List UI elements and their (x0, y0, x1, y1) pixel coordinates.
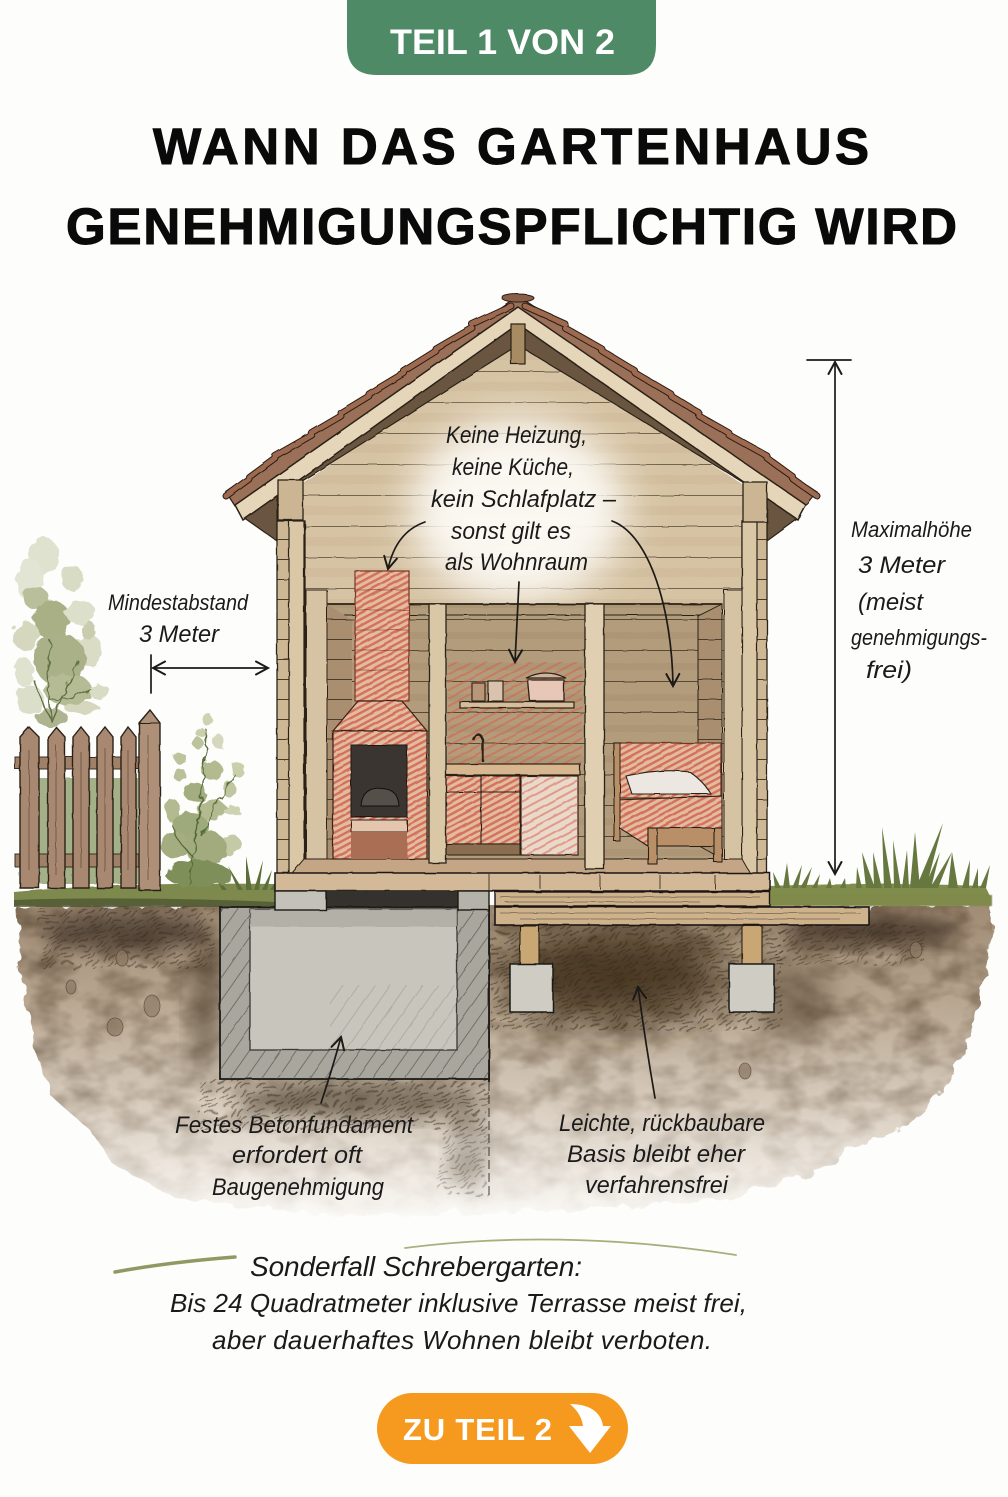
banner: Teil 1 von 2: TEIL 1 VON 2 (390, 23, 615, 62)
deck (275, 873, 770, 891)
icon: curved down arrow (569, 1404, 611, 1453)
label: rückbaubare Basis: Basis bleibt eher (567, 1141, 746, 1168)
arrow to kitchen (515, 582, 519, 662)
tree behind fence (12, 538, 110, 727)
label: Mindestabstand: 3 Meter (139, 621, 220, 648)
label: Maximalhöhe: genehmigungs- (851, 625, 987, 650)
inner pillars (429, 604, 604, 869)
label: rückbaubare Basis: verfahrensfrei (585, 1172, 729, 1199)
light patch behind central note (410, 418, 626, 602)
concrete slab foundation (220, 891, 489, 1079)
note: keine Heizung, Küche, Schlafplatz: Keine Heizung, (446, 422, 587, 449)
green brush stroke left (115, 1257, 235, 1272)
corner post right (742, 482, 767, 875)
label: Maximalhöhe: (meist (858, 589, 924, 616)
green brush stroke right (405, 1239, 736, 1255)
arrow to fireplace (388, 522, 425, 569)
height dimension arrow (807, 360, 851, 874)
grass strip left (14, 856, 278, 907)
label: Maximalhöhe: frei) (866, 657, 912, 684)
note: keine Heizung, Küche, Schlafplatz: kein Schlafplatz – (431, 486, 617, 513)
label: rückbaubare Basis: Leichte, rückbaubare (559, 1110, 765, 1137)
label: Maximalhöhe: 3 Meter (858, 552, 946, 579)
soil cross-section (16, 906, 992, 1216)
room interior (306, 590, 742, 867)
note: Sonderfall Schrebergarten (170, 1251, 747, 1355)
label: Maximalhöhe (851, 517, 987, 684)
title: WANN DAS GARTENHAUS (153, 118, 869, 175)
note: keine Heizung, Küche, Schlafplatz: sonst gilt es (451, 518, 571, 545)
note: Sonderfall Schrebergarten: aber dauerhaftes Wohnen bleibt verboten. (212, 1325, 712, 1355)
roof tiles (226, 294, 817, 506)
note: keine Heizung, Küche, Schlafplatz (431, 422, 617, 576)
fence (15, 710, 160, 890)
title (66, 118, 957, 255)
gable wall (277, 340, 767, 875)
corner post left (277, 480, 305, 875)
barge boards (235, 307, 806, 520)
label: rückbaubare Basis (559, 1110, 765, 1199)
king post (511, 324, 525, 364)
bed (614, 743, 722, 864)
button: Zu Teil 2 (377, 1393, 628, 1464)
timber beams and concrete piers (495, 892, 869, 1012)
label: Maximalhöhe: Maximalhöhe (851, 517, 972, 542)
label: Mindestabstand (108, 590, 249, 648)
note: Sonderfall Schrebergarten: Bis 24 Quadratmeter inklusive Terrasse meist frei, (170, 1288, 747, 1318)
bush beside fence (161, 713, 245, 887)
label: Mindestabstand: Mindestabstand (108, 590, 249, 615)
divider line between foundations (488, 905, 490, 1195)
label: Betonfundament: erfordert oft (232, 1142, 363, 1169)
banner: Teil 1 von 2 (347, 0, 656, 75)
note: keine Heizung, Küche, Schlafplatz: als Wohnraum (445, 549, 588, 576)
roof underside (243, 320, 800, 541)
label: Betonfundament: Baugenehmigung (212, 1174, 385, 1201)
grass strip right (768, 823, 992, 906)
arrow to bed (612, 521, 673, 686)
floor (292, 859, 750, 873)
fireplace with chimney (333, 571, 427, 859)
note: keine Heizung, Küche, Schlafplatz: keine Küche, (452, 454, 574, 481)
note: Sonderfall Schrebergarten: Sonderfall Schrebergarten: (250, 1251, 582, 1282)
arrow to concrete foundation (321, 1037, 341, 1103)
distance dimension arrow (151, 655, 268, 693)
kitchen (441, 662, 582, 855)
garden house (226, 294, 817, 891)
title: GENEHMIGUNGSPFLICHTIG WIRD (66, 198, 957, 255)
label: Betonfundament (175, 1112, 414, 1201)
arrow to light base (638, 987, 655, 1098)
button: Zu Teil 2: ZU TEIL 2 (403, 1412, 552, 1447)
label: Betonfundament: Festes Betonfundament (175, 1112, 414, 1139)
